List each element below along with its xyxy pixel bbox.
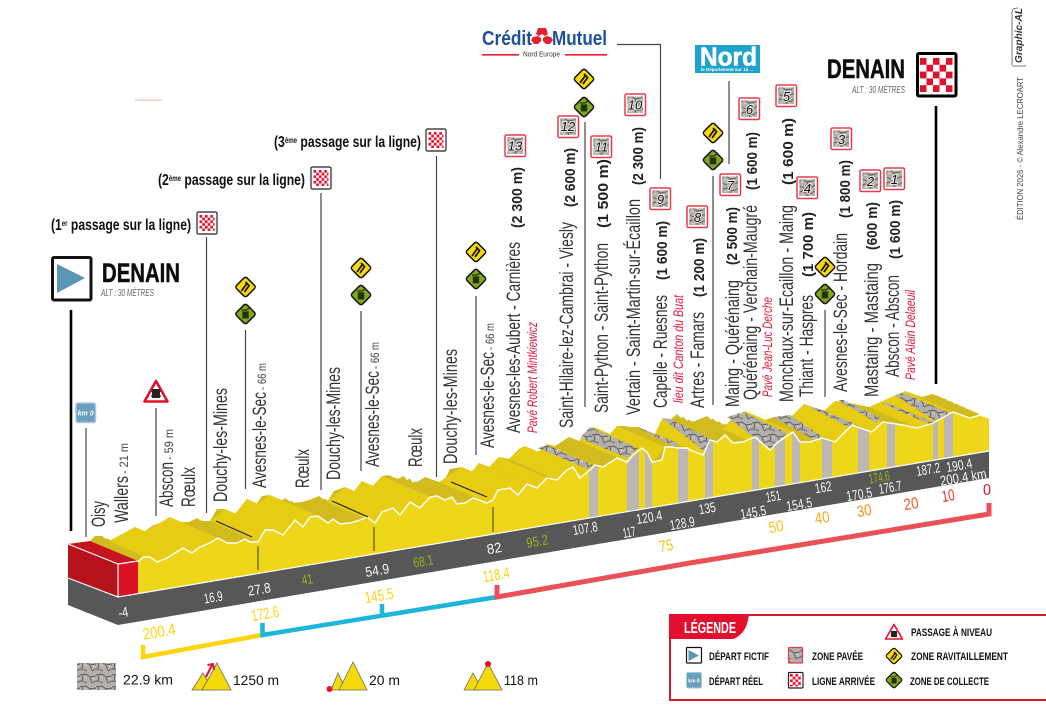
passage 1 on the line: (1	[51, 217, 65, 234]
cobbled surfaces	[538, 393, 950, 469]
passage 3 on the line	[274, 129, 446, 477]
countdown labels	[142, 482, 991, 644]
icons: supply and collect zone 5	[702, 122, 724, 405]
sector 6: Quérénaing - Verchain-Maugré	[741, 205, 762, 400]
place label: Abscon: - 59 m	[162, 429, 176, 460]
sector 4: 4	[804, 181, 811, 196]
place label: Abscon: Abscon	[157, 462, 178, 507]
place label: Avesnes-le-Sec 3: Avesnes-le-Sec	[478, 352, 499, 448]
kilometre labels on the road: 151	[764, 487, 782, 505]
sector 8: Artres - Famars	[688, 312, 709, 408]
finish block: Denain: DENAIN	[827, 54, 905, 84]
place label: Roeulx 1: Rœulx	[179, 467, 200, 507]
sector 2: (600 m)	[864, 202, 881, 250]
sector 12: Saint-Hilaire-lez-Cambrai - Viesly	[557, 222, 578, 428]
countdown labels: 200.4	[142, 621, 177, 644]
sector 1	[883, 168, 918, 380]
sector 2: Mastaing - Mastaing	[862, 263, 883, 397]
logo: Crédit Mutuel Nord Europe: Mutuel	[552, 28, 607, 50]
place label: Douchy-les-Mines 2: Douchy-les-Mines	[324, 367, 345, 480]
icon: km 0 sign	[76, 403, 96, 537]
sector 10: Vertain - Saint-Martin-sur-Écaillon	[624, 199, 645, 415]
passage 2 on the line	[158, 167, 331, 490]
kilometre labels on the road: 68.1	[412, 552, 435, 571]
white profile line	[138, 412, 989, 562]
sector 2	[860, 170, 883, 397]
place label: Avesnes-le-Sec 3: - 66 m	[483, 323, 497, 350]
sector 5: (1 600 m)	[780, 118, 797, 185]
kilometre labels on the road: 41	[300, 570, 314, 588]
legend item: supply zone: ZONE RAVITAILLEMENT	[911, 651, 1008, 663]
kilometre labels on the road: 27.8	[247, 579, 272, 599]
kilometre labels on the road: 190.4	[945, 455, 973, 475]
kilometre labels on the road: 174.6	[867, 467, 891, 487]
kilometre labels on the road: 54.9	[364, 560, 391, 580]
passage 2 on the line: (2	[158, 172, 172, 189]
sector 6: Pavé Jean-Luc Derche	[759, 297, 775, 397]
icons: supply and collect zone 6	[814, 256, 836, 397]
logo: Nord: Nord	[700, 42, 757, 72]
sunlit ridges	[109, 391, 953, 562]
passage 3 on the line: (3	[274, 134, 288, 151]
passage 2 on the line: ème	[169, 174, 181, 183]
logo: Crédit Mutuel Nord Europe: Crédit	[482, 28, 532, 50]
place label: Oisy: Oisy	[89, 501, 110, 527]
sector 7	[720, 174, 744, 407]
start block: Denain	[52, 258, 180, 300]
icons: supply and collect zone 4	[573, 68, 595, 407]
supply zone markers	[216, 482, 493, 570]
decorative header tick	[135, 100, 162, 101]
finish block: Denain	[827, 54, 956, 96]
kilometre labels on the road: 176.7	[878, 477, 903, 497]
countdown bar: blue segment	[262, 597, 497, 635]
kilometre labels on the road: 154.5	[785, 494, 813, 514]
legend item: real start	[686, 672, 763, 688]
countdown labels: 118.4	[482, 565, 511, 586]
sector 6: 6	[746, 102, 754, 117]
sector 13	[504, 135, 540, 433]
stat: highest altitude	[464, 661, 538, 690]
place label: Avesnes-le-Sec 2: Avesnes-le-Sec	[363, 371, 384, 467]
credit: Graphic-AL: Graphic-AL	[1014, 8, 1025, 63]
sector 9: (1 600 m)	[654, 221, 671, 280]
sector 8	[687, 206, 709, 408]
sector 1: (1 600 m)	[887, 200, 904, 259]
countdown labels: 10	[940, 487, 956, 506]
legend item: fictive start	[686, 648, 769, 663]
sector 3: (1 800 m)	[837, 160, 854, 218]
legend item: finish line	[788, 672, 875, 688]
legend item: real start: DÉPART RÉEL	[709, 675, 763, 688]
place label: Roeulx 2: Rœulx	[293, 449, 314, 488]
sector 12: 12	[561, 119, 576, 134]
sector 2: 2	[866, 174, 875, 189]
countdown labels: 145.5	[364, 586, 395, 607]
profile top surface	[90, 391, 983, 591]
kilometre labels on the road: 162	[813, 478, 833, 496]
leader line: Nord to sector 7	[728, 81, 730, 164]
countdown labels: 30	[855, 502, 873, 521]
place label: Wallers: Wallers	[112, 476, 133, 523]
stat: lowest altitude: 20 m	[369, 672, 400, 688]
icons: supply and collect zone 3	[465, 241, 487, 455]
sector 7: (2 500 m)	[724, 207, 741, 265]
sector 8: (1 200 m)	[691, 238, 708, 297]
front face	[138, 412, 989, 594]
cobbled sector bands	[589, 412, 953, 518]
legend item: cobbled zone: ZONE PAVÉE	[812, 650, 863, 663]
kilometre labels on the road: 187.2	[915, 459, 941, 479]
legend item: fictive start: DÉPART FICTIF	[709, 650, 769, 663]
sector 11: Saint-Python - Saint-Python	[592, 243, 613, 413]
sector 13: Avesnes-les-Aubert - Carnières	[504, 242, 525, 433]
icon: km 0 sign: km 0	[78, 410, 94, 418]
kilometre labels on the road: 145.5	[739, 502, 767, 522]
place label: Douchy-les-Mines 1: Douchy-les-Mines	[211, 388, 232, 502]
place label: Avesnes-le-Sec 1: - 66 m	[255, 363, 269, 390]
start block: Denain: ALT : 30 MÈTRES	[100, 286, 154, 299]
legend item: finish line: LIGNE ARRIVÉE	[812, 675, 875, 688]
legend item: real start: km 0	[688, 678, 700, 684]
logo: Crédit Mutuel Nord Europe: Nord Europe	[523, 52, 560, 58]
stat: total climbing	[192, 663, 279, 690]
sector 1: 1	[891, 172, 898, 187]
stat: cobbled distance	[77, 663, 173, 690]
sector 11: 11	[595, 140, 608, 154]
red start block	[68, 451, 989, 597]
countdown labels: 40	[813, 509, 831, 528]
finish line	[935, 106, 937, 384]
legend item: level crossing	[886, 624, 992, 639]
kilometre labels on the road: 107.8	[572, 518, 599, 538]
panel: legend	[669, 614, 1046, 700]
kilometre labels on the road: -4	[117, 603, 130, 621]
kilometre labels on the road: 128.9	[669, 513, 696, 533]
passage 1 on the line	[51, 212, 217, 513]
legend item: collect zone	[886, 672, 989, 688]
kilometre labels on the road: 95.2	[525, 531, 550, 551]
legend item: level crossing: PASSAGE À NIVEAU	[911, 626, 992, 639]
countdown labels: 75	[658, 537, 675, 556]
countdown labels: 172.6	[250, 604, 281, 625]
countdown bar: red segment	[497, 503, 989, 597]
chart: 3D elevation profile	[68, 391, 989, 625]
legend item: cobbled zone	[788, 648, 863, 663]
sector 11: (1 500 m)	[595, 159, 612, 228]
legend item: supply zone	[886, 648, 1008, 664]
passage 3 on the line: passage sur la ligne)	[297, 134, 421, 151]
sector 9	[650, 188, 686, 408]
sector 4: Thiant - Haspres	[797, 295, 818, 397]
sector 8: 8	[694, 210, 702, 225]
kilometre labels on the road: 120.4	[635, 507, 663, 527]
icons: supply and collect zone 1	[235, 276, 256, 489]
sector 12: (2 600 m)	[562, 148, 579, 207]
legend heading: LÉGENDE	[684, 618, 736, 637]
countdown labels: 0	[983, 482, 991, 499]
start block: Denain: DENAIN	[102, 258, 180, 288]
place label: Roeulx 3: Rœulx	[406, 428, 427, 467]
finish block: Denain: ALT : 30 MÈTRES	[851, 83, 905, 96]
passage 2 on the line: passage sur la ligne)	[181, 172, 305, 189]
legend item: collect zone: ZONE DE COLLECTE	[910, 676, 989, 688]
stat: cobbled distance: 22.9 km	[123, 672, 173, 688]
sector 13: Pavé Robert Mintkiewicz	[524, 322, 540, 433]
sector 9: Capelle - Ruesnes	[651, 295, 672, 408]
legend heading	[669, 614, 749, 639]
stat: highest altitude: 118 m	[504, 672, 538, 688]
countdown labels: 20	[902, 495, 920, 514]
logo: Nord: le Département sur 1à →	[701, 67, 754, 72]
passage 3 on the line: ème	[285, 136, 297, 145]
sector 5: Monchaux-sur-Ecaillon - Maing	[777, 205, 798, 402]
kilometre labels on the road: 117	[621, 523, 637, 541]
sector 1: Pavé Alain Delaeuil	[902, 289, 918, 380]
sector 13: 13	[508, 138, 523, 154]
sector 10: (2 300 m)	[630, 127, 647, 185]
start line	[70, 310, 72, 531]
sector 6	[739, 98, 775, 400]
kilometre labels on the road: 200.4 km	[939, 465, 988, 489]
stat: lowest altitude	[326, 662, 400, 692]
leader line: sponsor to sector 9	[617, 44, 660, 179]
kilometre labels on the road: 170.5	[845, 484, 873, 504]
credit: edition: ÉDITION 2026 - © Alexandre LECROART	[1016, 77, 1025, 220]
sector 6: (1 600 m)	[744, 132, 761, 190]
kilometre labels on the road: 135	[697, 499, 717, 517]
sector 9: lieu dit Canton du Buat	[670, 294, 686, 403]
logo: Crédit Mutuel Nord Europe	[482, 28, 607, 58]
place label: Avesnes-le-Sec 2: - 66 m	[368, 342, 382, 369]
sector 3: Avesnes-le-Sec - Hordain	[831, 233, 852, 392]
sector 3: 3	[838, 132, 846, 147]
sector 7: Maing - Quérénaing	[723, 280, 744, 407]
passage 1 on the line: passage sur la ligne)	[68, 217, 191, 234]
sector 1: Abscon - Abscon	[883, 275, 904, 377]
sector 9: 9	[657, 192, 664, 207]
icons: supply and collect zone 2	[350, 257, 372, 471]
sector 7: 7	[727, 178, 735, 193]
sector 13: (2 300 m)	[509, 167, 526, 228]
passage 1 on the line: er	[62, 219, 68, 228]
icon: level crossing	[144, 381, 168, 516]
sector 4: (1 700 m)	[800, 212, 817, 277]
countdown labels: 50	[767, 518, 785, 537]
kilometre labels on the road: 82	[485, 539, 503, 557]
place label: Avesnes-le-Sec 1: Avesnes-le-Sec	[250, 392, 271, 488]
road band	[68, 451, 989, 625]
stat: total climbing: 1250 m	[233, 672, 279, 688]
sector 4	[797, 177, 818, 397]
place label: Douchy-les-Mines 3: Douchy-les-Mines	[441, 349, 462, 464]
sector 10: 10	[628, 98, 643, 112]
kilometre labels on the road	[117, 455, 988, 621]
countdown bar: yellow segment	[143, 635, 262, 657]
kilometre labels on the road: 16.9	[202, 588, 224, 607]
place label: Wallers: - 21 m	[117, 443, 131, 474]
sector 5: 5	[783, 89, 791, 104]
